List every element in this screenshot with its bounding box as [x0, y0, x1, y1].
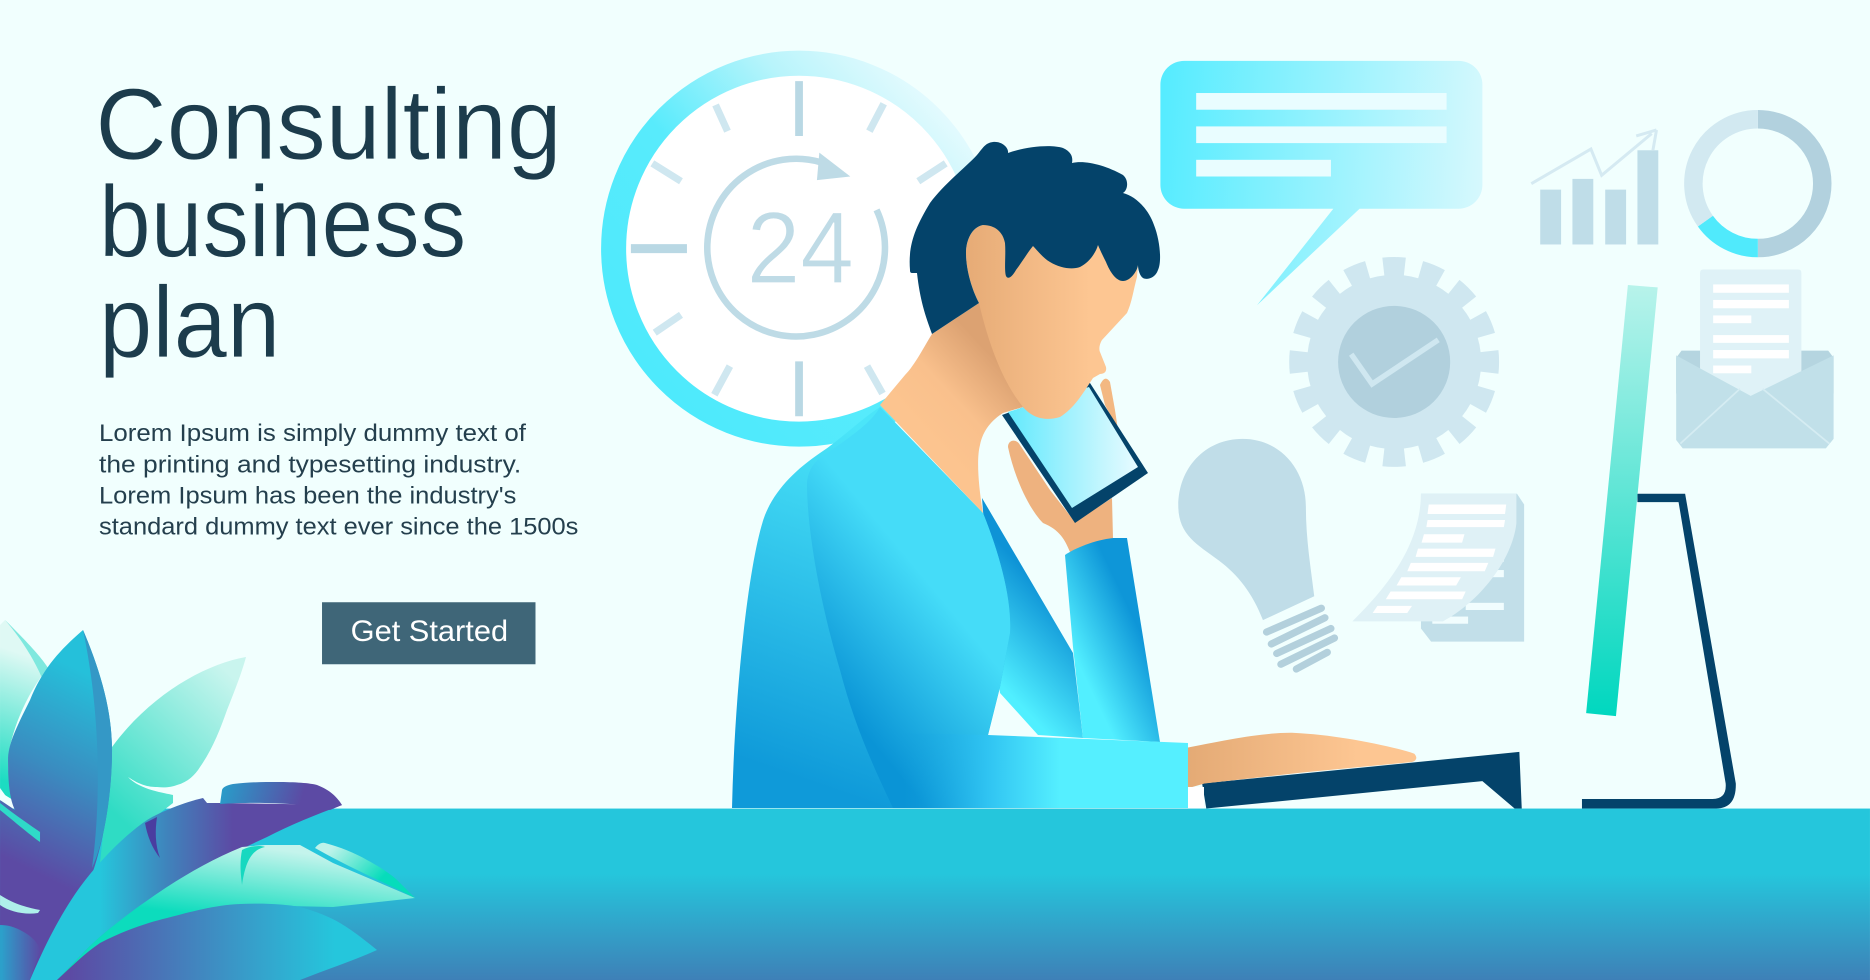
- monitor stand: [1582, 494, 1736, 809]
- face: [966, 225, 1140, 419]
- leaf gap: [0, 788, 13, 806]
- leaf: back green: [0, 620, 48, 800]
- banana leaf dark sliver: [145, 817, 160, 858]
- icon: documents: [1352, 494, 1524, 642]
- title: plan: [99, 266, 280, 379]
- ground band: [0, 809, 1870, 980]
- leaf: tall blue purple: [0, 630, 112, 980]
- computer monitor: [1582, 285, 1736, 809]
- phone: [1002, 383, 1148, 523]
- body text: [99, 420, 578, 540]
- leaf: back green edge: [5, 620, 48, 678]
- title: Consulting: [95, 68, 562, 181]
- torso: [732, 407, 1010, 808]
- leaf: bottom left blob: [0, 925, 40, 980]
- body text: Lorem Ipsum is simply dummy text of: [99, 420, 526, 447]
- monitor screen: [1586, 285, 1658, 716]
- leaf: blue bottom: [57, 904, 377, 980]
- body text: Lorem Ipsum has been the industry's: [99, 482, 516, 509]
- leaf: small green strip: [0, 803, 40, 842]
- 24 label: 24: [747, 190, 854, 305]
- icon: bar chart with rising arrow: [1531, 130, 1658, 244]
- icon: donut chart: [1693, 119, 1822, 248]
- torso side: [982, 498, 1083, 738]
- title: business: [99, 165, 466, 278]
- neck: [880, 303, 1023, 513]
- plant: [0, 620, 415, 980]
- icon: light bulb: [1178, 439, 1335, 669]
- leaf: green lobe tip: [315, 843, 415, 898]
- keyboard: [1202, 752, 1522, 809]
- lower sleeve: [900, 733, 1188, 808]
- body text: standard dummy text ever since the 1500s: [99, 513, 578, 540]
- button: get started: [322, 602, 535, 664]
- title: [95, 68, 562, 379]
- upper arm: [807, 407, 1010, 808]
- leaf: pale strip: [0, 895, 40, 914]
- leaf: right green: [100, 657, 246, 863]
- leaf: purple banana: [30, 798, 342, 980]
- letter: [1700, 270, 1801, 396]
- raised forearm: [1065, 538, 1160, 742]
- white gap under arm: [1188, 787, 1204, 809]
- body text: the printing and typesetting industry.: [99, 451, 521, 478]
- clock: 24 hours: [614, 63, 984, 434]
- banana leaf top fold: [220, 782, 342, 810]
- 24 hour arrow arc: [707, 153, 885, 336]
- leaf: green lower right: [57, 845, 415, 980]
- button: get started: Get Started: [351, 615, 508, 648]
- curled front page: [1352, 494, 1516, 621]
- hair: [910, 142, 1160, 334]
- speech bubble: [1160, 61, 1482, 305]
- raised hand finger: [1100, 379, 1118, 430]
- clock ticks: [631, 81, 946, 416]
- leaf: green teal sliver: [241, 846, 265, 885]
- person: [732, 142, 1204, 809]
- tall leaf edge shade: [83, 630, 112, 868]
- icon: envelope with letter: [1676, 270, 1834, 448]
- icon: gear with check: [1299, 267, 1490, 457]
- typing hand: [1181, 733, 1416, 788]
- raised hand: [1008, 441, 1113, 552]
